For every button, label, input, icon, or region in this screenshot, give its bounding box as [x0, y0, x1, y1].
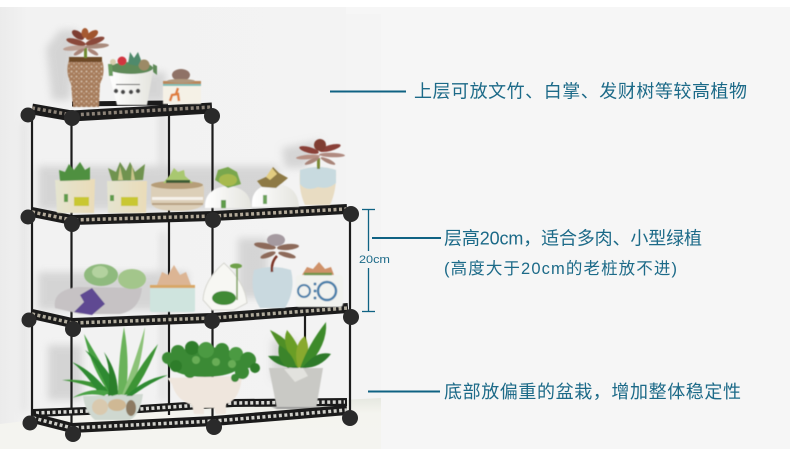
- rack front rim and connector balls: [20, 108, 359, 442]
- callout: middle shelves: (高度大于20cm的老桩放不进): [444, 259, 677, 278]
- shelving rack: [32, 103, 350, 434]
- plant: stacked ceramic dish: [151, 168, 204, 211]
- plant: concrete pot with leafy plant: [268, 322, 331, 409]
- plant: glazed pot with red rosette: [296, 139, 345, 205]
- callout: middle shelves: [372, 228, 702, 278]
- plant: spider plant in glass bowl: [62, 327, 168, 420]
- shelf 2: [32, 209, 347, 220]
- plant: blue white vase with rosette: [252, 234, 299, 308]
- plant: white round pot right: [252, 167, 299, 207]
- callout: top shelf: 上层可放文竹、白掌、发财树等较高植物: [414, 82, 747, 102]
- height dimension marker: [359, 209, 390, 312]
- dimension label: 20cm: [359, 254, 390, 266]
- shelf 4 back rim: [33, 402, 347, 413]
- plants top shelf: [63, 28, 201, 107]
- plant: white round pot left: [205, 167, 251, 208]
- plant: tall brown vase: [63, 28, 109, 107]
- shelf 3: [32, 308, 348, 323]
- callout: bottom shelf: 底部放偏重的盆栽，增加整体稳定性: [444, 382, 741, 402]
- plants bottom shelf: [62, 322, 331, 420]
- shelf 4 front rim: [33, 410, 347, 428]
- plant: cream pot with green succulent: [55, 162, 95, 213]
- rack poles: [32, 105, 350, 434]
- plant: blue pattern pot: [296, 262, 343, 307]
- connector balls: [20, 108, 359, 442]
- plant: pig-shaped white pot with fern: [162, 341, 260, 414]
- plant: cream square pot with deer: [163, 69, 201, 104]
- plants second shelf: [55, 139, 345, 213]
- plants third shelf: [55, 234, 343, 315]
- plant: mint striped pot: [150, 265, 195, 312]
- plant: cream pot with striped aloe: [107, 162, 147, 213]
- plant: white pot with succulents: [108, 52, 157, 105]
- plant: white teardrop planter: [203, 263, 247, 310]
- shelf 1: [32, 103, 212, 116]
- plant: grey pig pot with succulents: [55, 264, 146, 315]
- wall shadows: [23, 30, 322, 412]
- callout: middle shelves: 层高20cm，适合多肉、小型绿植: [444, 228, 702, 248]
